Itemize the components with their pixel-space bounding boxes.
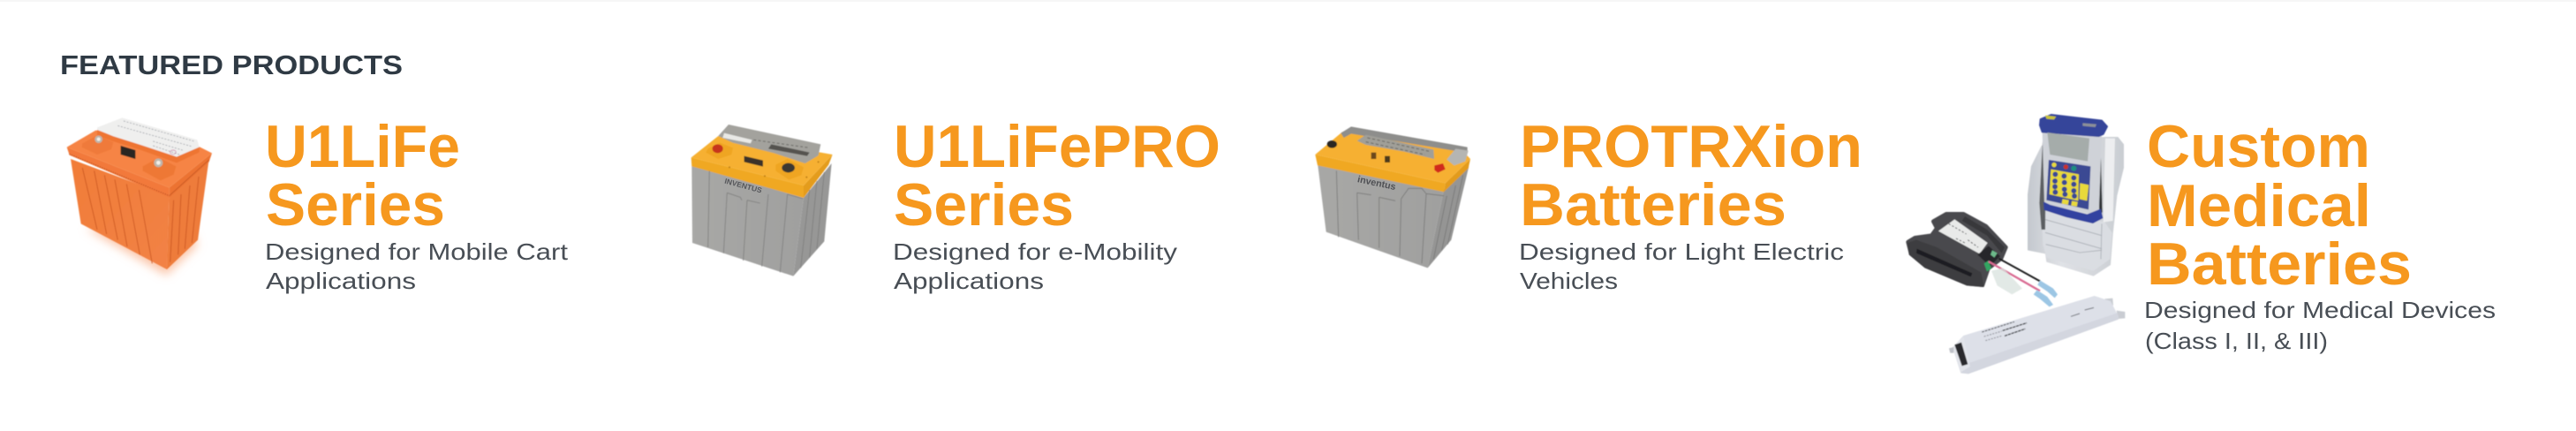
text: U1LiFe description — [265, 238, 569, 294]
title: U1LiFe Series: U1LiFe — [265, 113, 460, 180]
text: medical description: Designed for Medical Devices — [2144, 297, 2496, 323]
text: U1LiFe description: Applications — [266, 268, 416, 294]
title: U1LiFe Series: Series — [266, 171, 445, 238]
icon: grey and yellow PROTRXion battery: inventus — [1356, 174, 1397, 193]
icon: grey and yellow U1LiFePRO battery — [691, 125, 833, 276]
icon: handheld medical device in cradle — [2028, 115, 2124, 276]
panel: PROTRXion batteries — [1315, 113, 1862, 294]
icon: blue wire terminal lugs — [2034, 280, 2058, 306]
text: PROTRXion description: Designed for Light Electric — [1519, 238, 1844, 265]
icon: grey and yellow U1LiFePRO battery: INVENTUS — [723, 177, 763, 195]
text: PROTRXion description: Vehicles — [1520, 268, 1618, 294]
panel: U1LiFe series — [67, 113, 569, 294]
title: Custom Medical Batteries — [2147, 113, 2412, 298]
title: Custom Medical Batteries: Medical — [2147, 172, 2371, 239]
title: U1LiFePRO Series: Series — [894, 171, 1074, 238]
text: PROTRXion description — [1519, 238, 1844, 294]
title: U1LiFePRO Series — [894, 113, 1220, 238]
text: U1LiFePRO description: Designed for e-Mobility — [893, 238, 1177, 265]
title: U1LiFePRO Series: U1LiFePRO — [894, 113, 1220, 180]
panel: custom medical batteries — [1907, 113, 2496, 374]
text: medical description — [2144, 297, 2496, 354]
title: U1LiFe Series — [265, 113, 460, 238]
title: PROTRXion Batteries — [1520, 113, 1862, 238]
text: medical description: (Class I, II, & III) — [2145, 328, 2328, 354]
title: PROTRXion Batteries: Batteries — [1520, 171, 1787, 238]
title: Custom Medical Batteries: Custom — [2147, 113, 2370, 180]
text: U1LiFe description: Designed for Mobile Cart — [265, 238, 569, 265]
title: Custom Medical Batteries: Batteries — [2147, 231, 2412, 298]
text: U1LiFePRO description: Applications — [894, 268, 1044, 294]
heading: featured products: FEATURED PRODUCTS — [60, 49, 403, 80]
icon: black medical battery pack with wires — [1907, 214, 2040, 294]
icon: grey and yellow PROTRXion battery — [1315, 126, 1470, 268]
text: U1LiFePRO description — [893, 238, 1177, 294]
icon: orange U1LiFe battery — [67, 117, 212, 276]
panel: U1LiFePRO series — [691, 113, 1220, 294]
title: PROTRXion Batteries: PROTRXion — [1520, 113, 1862, 180]
icon: white cylindrical medical battery — [1949, 296, 2125, 374]
